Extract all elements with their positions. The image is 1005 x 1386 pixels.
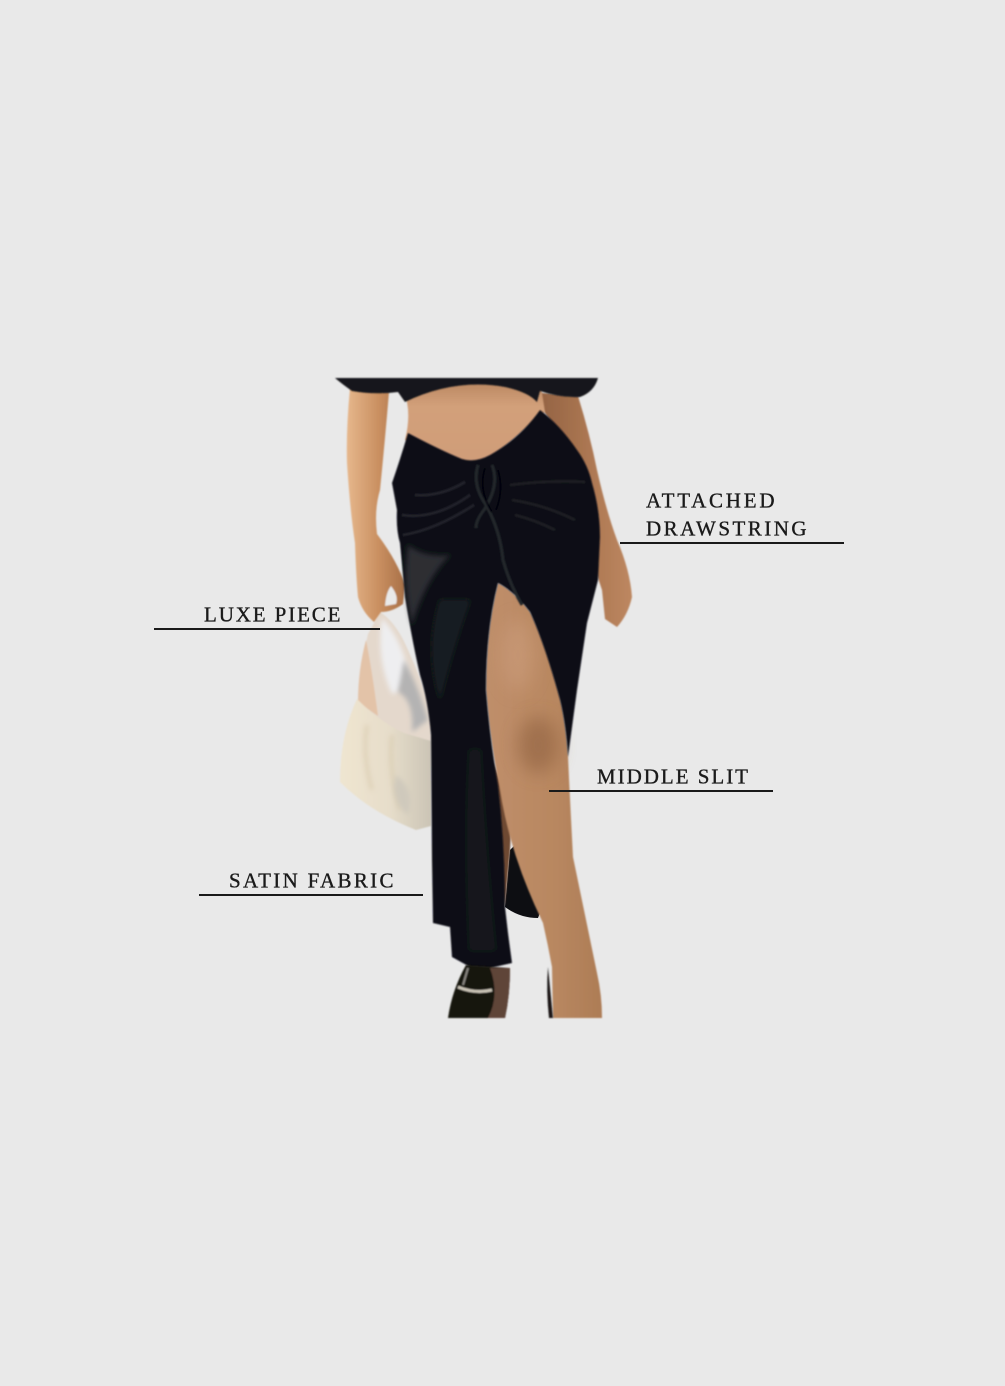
product photo: model wearing skirt xyxy=(335,378,632,1018)
back skirt panel xyxy=(505,840,545,918)
callout: attached drawstring xyxy=(620,488,844,544)
arms xyxy=(347,388,632,627)
leg xyxy=(486,583,602,1018)
torso xyxy=(398,380,545,468)
satin highlights xyxy=(406,545,450,625)
knee shading xyxy=(518,717,558,773)
callout: middle slit: MIDDLE SLIT xyxy=(597,764,748,788)
drawstring xyxy=(476,465,522,605)
crop top xyxy=(335,378,598,402)
callout: attached drawstring: DRAWSTRING xyxy=(646,516,806,540)
bag xyxy=(340,612,431,830)
callout: luxe piece: LUXE PIECE xyxy=(204,602,340,626)
skirt xyxy=(392,410,600,968)
shoe xyxy=(448,965,553,1018)
inner leg shadow xyxy=(492,760,512,905)
callout: satin fabric: SATIN FABRIC xyxy=(229,868,394,892)
callout: attached drawstring: ATTACHED xyxy=(646,488,774,512)
